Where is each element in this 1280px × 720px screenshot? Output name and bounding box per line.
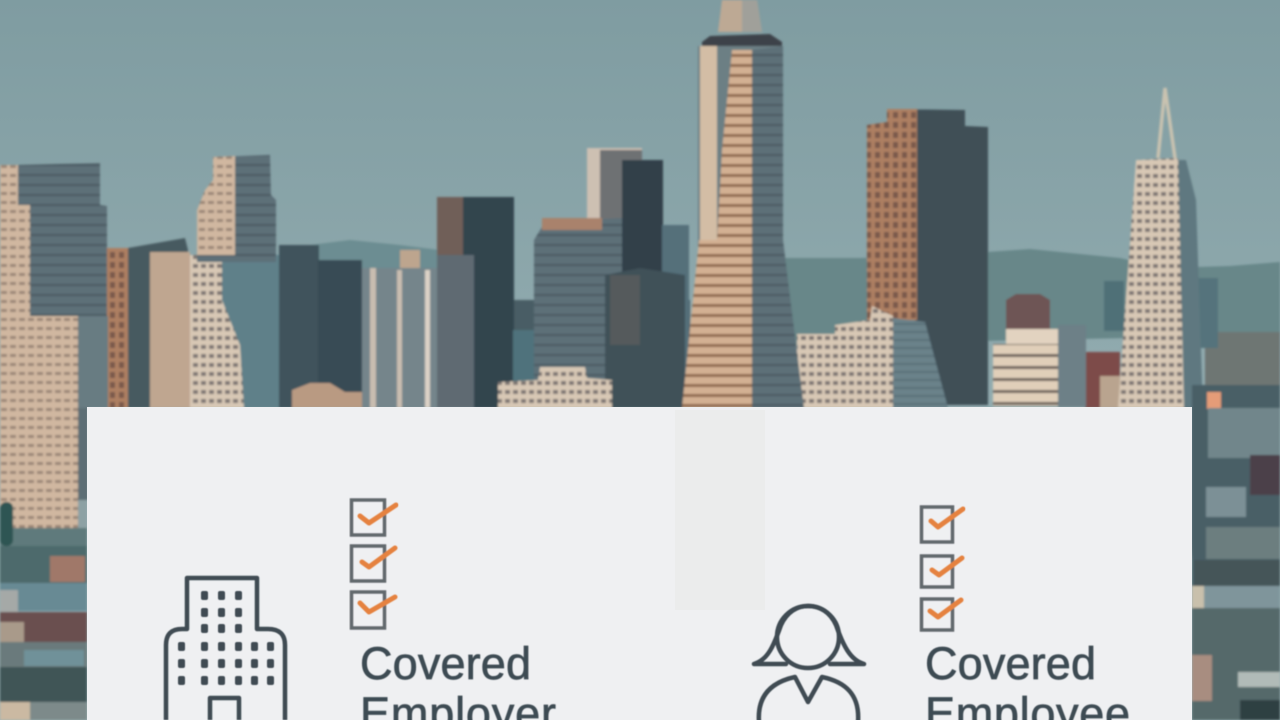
low buildings centre right [797,294,1120,408]
icon: office building [166,578,285,720]
icon: employee checklist [922,507,963,630]
heading: Covered Employee [925,638,1130,720]
icon: employee person [754,606,864,720]
dark tower centre right [867,109,988,405]
heading: Covered Employee: Covered [925,638,1096,689]
heading: Covered Employer: Covered [360,638,531,689]
hills [310,240,1280,408]
lower right city blocks [1192,385,1280,720]
lower left city blocks [0,316,108,720]
panel: white card [87,407,1192,720]
skyline left group [0,148,690,408]
heading: Covered Employer [360,638,556,720]
Transamerica Pyramid [682,0,804,408]
Salesforce-like spire tower [1104,88,1218,560]
icon: employer checklist [352,500,396,628]
building windows [178,591,274,685]
